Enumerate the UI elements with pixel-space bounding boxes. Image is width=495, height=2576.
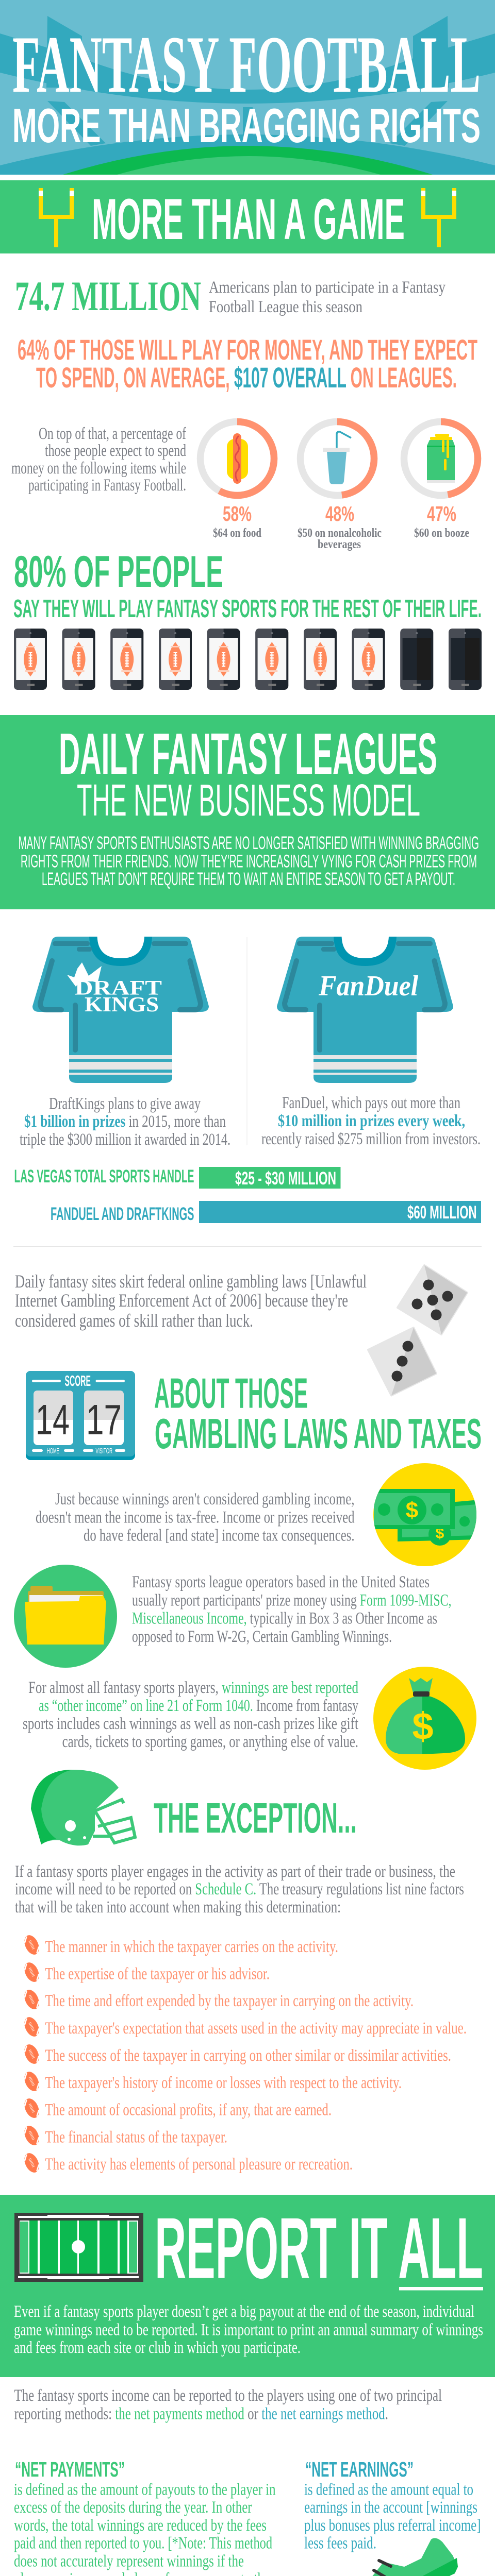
text block: net payments: does not accurately represent winnings if the (14, 2552, 244, 2571)
text block: net earnings (304, 2458, 481, 2553)
text block: draftkings (20, 1094, 230, 1149)
text block: net payments: paid and then reported to you. [*Note: This method (14, 2534, 272, 2553)
icon: hot dog (227, 433, 248, 484)
icon: scoreboard: 14 (36, 1396, 70, 1444)
label: beverage spend (298, 527, 382, 551)
panel: daily fantasy leagues (0, 715, 495, 909)
icon: scoreboard (26, 1371, 135, 1460)
callout: 64 percent (18, 333, 477, 394)
icon: folder in circle (14, 1565, 117, 1668)
label: 47 percent: 47% (427, 502, 456, 526)
text block: spending intro: participating in Fantasy Football. (28, 476, 186, 495)
text block: spending intro: On top of that, a percentage of (39, 425, 186, 443)
text block: net earnings: “NET EARNINGS” (305, 2458, 414, 2481)
icon: football field (14, 2213, 143, 2282)
text block: other income: For almost all fantasy sports players, winnings are best reported (28, 1679, 358, 1697)
text block: reporting methods: reporting methods: the net payments method or the net earnings method. (14, 2405, 388, 2424)
icon: drink cup (323, 432, 351, 484)
text block: not tax free: do have federal [and state] income tax consequences. (84, 1527, 355, 1545)
icon: football cleat (345, 2538, 458, 2576)
list: nine factors: The financial status of the taxpayer. (45, 2128, 227, 2146)
icon: fanduel jersey: FanDuel (318, 970, 418, 1002)
label: booze spend: $60 on booze (414, 527, 469, 540)
bar chart: las vegas vs fanduel and draftkings (14, 1166, 481, 1224)
icon: draftkings jersey: KINGS (85, 992, 159, 1016)
text block: enthusiasts (19, 833, 479, 889)
text block: reporting methods (14, 2386, 442, 2424)
list: nine factors: The expertise of the taxpayer or his advisor. (45, 1965, 270, 1984)
icon: money bills in circle: $ (436, 1525, 444, 1542)
stat: 74.7 million: 74.7 MILLION (15, 273, 201, 319)
label: beverage spend: beverages (318, 538, 361, 551)
chart: beverages donut 48 percent (298, 421, 382, 551)
text block: not tax free (36, 1490, 355, 1545)
chart: food donut 58 percent (200, 421, 274, 540)
text block: net earnings: less fees paid. (304, 2534, 376, 2553)
icon: draftkings jersey (32, 937, 209, 1083)
text block: federal gambling laws: Daily fantasy sites skirt federal online gambling laws [Unlawful (15, 1271, 367, 1292)
icon: money bag in circle (373, 1667, 476, 1770)
text block: americans plan: Americans plan to participate in a Fantasy (209, 278, 446, 297)
chart: ten phones pictogram (14, 629, 482, 690)
text block: form 1099 misc (132, 1573, 452, 1646)
icon: scoreboard: HOME (47, 1447, 59, 1455)
text block: americans plan: Football League this season (209, 298, 362, 316)
panel: more than a game banner (0, 180, 495, 253)
icon: scoreboard: VISITOR (96, 1447, 112, 1455)
text block: net payments (14, 2458, 275, 2576)
label: beverage spend: $50 on nonalcoholic (298, 527, 382, 540)
text block: draftkings: $1 billion in prizes in 2015, more than (24, 1112, 226, 1131)
list: nine factors: The activity has elements of personal pleasure or recreation. (45, 2155, 353, 2174)
text block: annual summary (14, 2302, 483, 2357)
text block: fanduel (261, 1094, 481, 1148)
heading: about those gambling laws and taxes: ABOUT THOSE (154, 1369, 308, 1417)
text block: net payments: “NET PAYMENTS” (15, 2458, 125, 2481)
icon: football helmet (31, 1770, 135, 1845)
text block: net payments: words, the total winnings are reduced by the fees (14, 2516, 267, 2535)
text block: spending intro: money on the following items while (11, 459, 186, 478)
bar: las vegas value (199, 1167, 340, 1189)
text block: spending intro: those people expect to spend (45, 442, 186, 460)
icon: fanduel jersey (277, 937, 453, 1083)
label: 58 percent: 58% (223, 502, 252, 526)
text block: not tax free: doesn't mean the income is tax-free. Income or prizes received (36, 1509, 355, 1527)
text block: other income: cards, tickets to sporting games, or anything else of value. (62, 1733, 358, 1751)
text block: net payments: is defined as the amount of payouts to the player in (14, 2480, 275, 2499)
label: las vegas: LAS VEGAS TOTAL SPORTS HANDLE (14, 1166, 194, 1187)
list: nine factors (22, 1933, 467, 2175)
text block: federal gambling laws (15, 1271, 367, 1331)
icon: scoreboard: 17 (86, 1396, 122, 1444)
icon: bottle (427, 434, 455, 483)
list: nine factors: The manner in which the taxpayer carries on the activity. (45, 1938, 338, 1956)
chart: booze donut 47 percent (404, 421, 477, 540)
icon: draftkings jersey: DRAFT (75, 976, 162, 999)
text block: americans plan (209, 278, 446, 316)
icon: right goalpost (421, 188, 456, 247)
icon: money bills in circle (373, 1463, 480, 1566)
icon: scoreboard: SCORE (65, 1373, 91, 1389)
text block: federal gambling laws: considered games of skill rather than luck. (15, 1310, 253, 1331)
text block: form 1099 misc: usually report participants' prize money using Form 1099-MISC, (132, 1591, 452, 1609)
text block: other income (23, 1679, 358, 1751)
bar: fanduel and draftkings value (199, 1201, 481, 1223)
label: food spend: $64 on food (213, 527, 262, 540)
text block: schedule c (15, 1862, 464, 1917)
stat: 80 percent of people: 80% OF PEOPLE (14, 547, 223, 597)
bar: las vegas value: $25 - $30 MILLION (235, 1168, 336, 1189)
icon: money bag in circle: $ (412, 1705, 434, 1748)
text block: other income: as “other income” on line 21 of Form 1040. Income from fantasy (39, 1697, 358, 1715)
text block: form 1099 misc: opposed to Form W-2G, Certain Gambling Winnings. (132, 1628, 392, 1646)
text block: other income: sports includes cash winnings as well as non-cash prizes like gift (23, 1715, 358, 1733)
text block: draftkings: DraftKings plans to give away (49, 1094, 201, 1113)
icon: left goalpost (39, 188, 74, 247)
text block: federal gambling laws: Internet Gambling Enforcement Act of 2006] because they're (15, 1290, 348, 1311)
label: 48 percent: 48% (325, 502, 354, 526)
text block: spending intro (11, 425, 186, 495)
text block: draftkings: triple the $300 million it awarded in 2014. (20, 1130, 230, 1149)
text block: net payments: excess of the deposits during the year. In other (14, 2498, 252, 2517)
text block: schedule c: that will be taken into account when making this determination: (15, 1898, 341, 1917)
panel: stadium header (0, 0, 495, 175)
icon: dice (368, 1265, 467, 1395)
text block: not tax free: Just because winnings aren't considered gambling income, (55, 1490, 355, 1509)
panel: report it all (0, 2195, 495, 2377)
label: fanduel and draftkings: FANDUEL AND DRAFTKINGS (51, 1204, 194, 1224)
icon: money bills in circle: $ (406, 1498, 418, 1523)
heading: about those gambling laws and taxes (154, 1369, 482, 1458)
text block: annual summary: and fees from each site or club in which you participate. (14, 2338, 301, 2357)
list: nine factors: The amount of occasional profits, if any, that are earned. (45, 2101, 332, 2120)
